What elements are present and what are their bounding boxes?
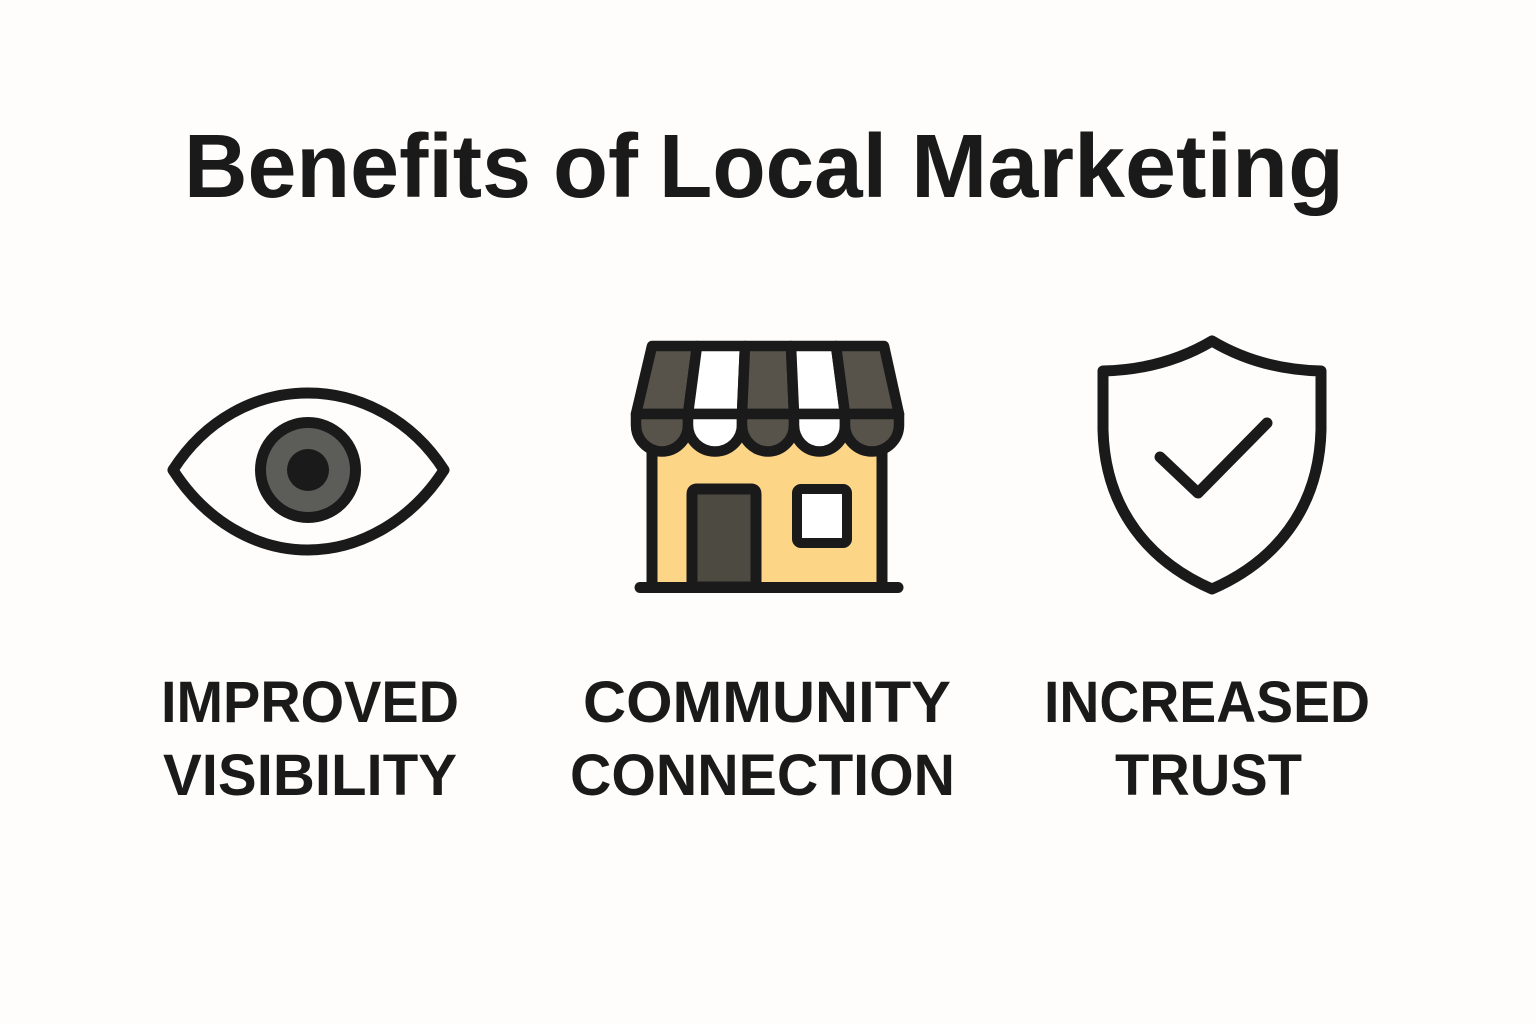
awning scallops <box>636 414 899 452</box>
title <box>184 117 1344 217</box>
label: increased trust <box>1044 670 1370 808</box>
check mark <box>1160 423 1267 493</box>
label: increased trust: INCREASED <box>1044 670 1370 735</box>
label: improved visibility: VISIBILITY <box>163 743 457 808</box>
shop wall <box>652 430 882 587</box>
title: Local <box>659 117 887 217</box>
icon: storefront <box>636 346 899 588</box>
door <box>692 489 756 587</box>
awning stripes <box>636 346 899 414</box>
title: Marketing <box>911 117 1344 217</box>
window <box>797 489 847 543</box>
label: improved visibility <box>161 670 459 808</box>
icon: eye <box>173 393 444 550</box>
title: of <box>553 117 639 217</box>
label: community connection <box>570 670 955 808</box>
label: increased trust: TRUST <box>1115 743 1302 808</box>
title: Benefits <box>184 117 531 217</box>
label: community connection: CONNECTION <box>570 743 955 808</box>
ground line <box>640 582 898 593</box>
label: improved visibility: IMPROVED <box>161 670 459 735</box>
label: community connection: COMMUNITY <box>583 670 951 735</box>
icon: shield with check <box>1103 341 1321 589</box>
